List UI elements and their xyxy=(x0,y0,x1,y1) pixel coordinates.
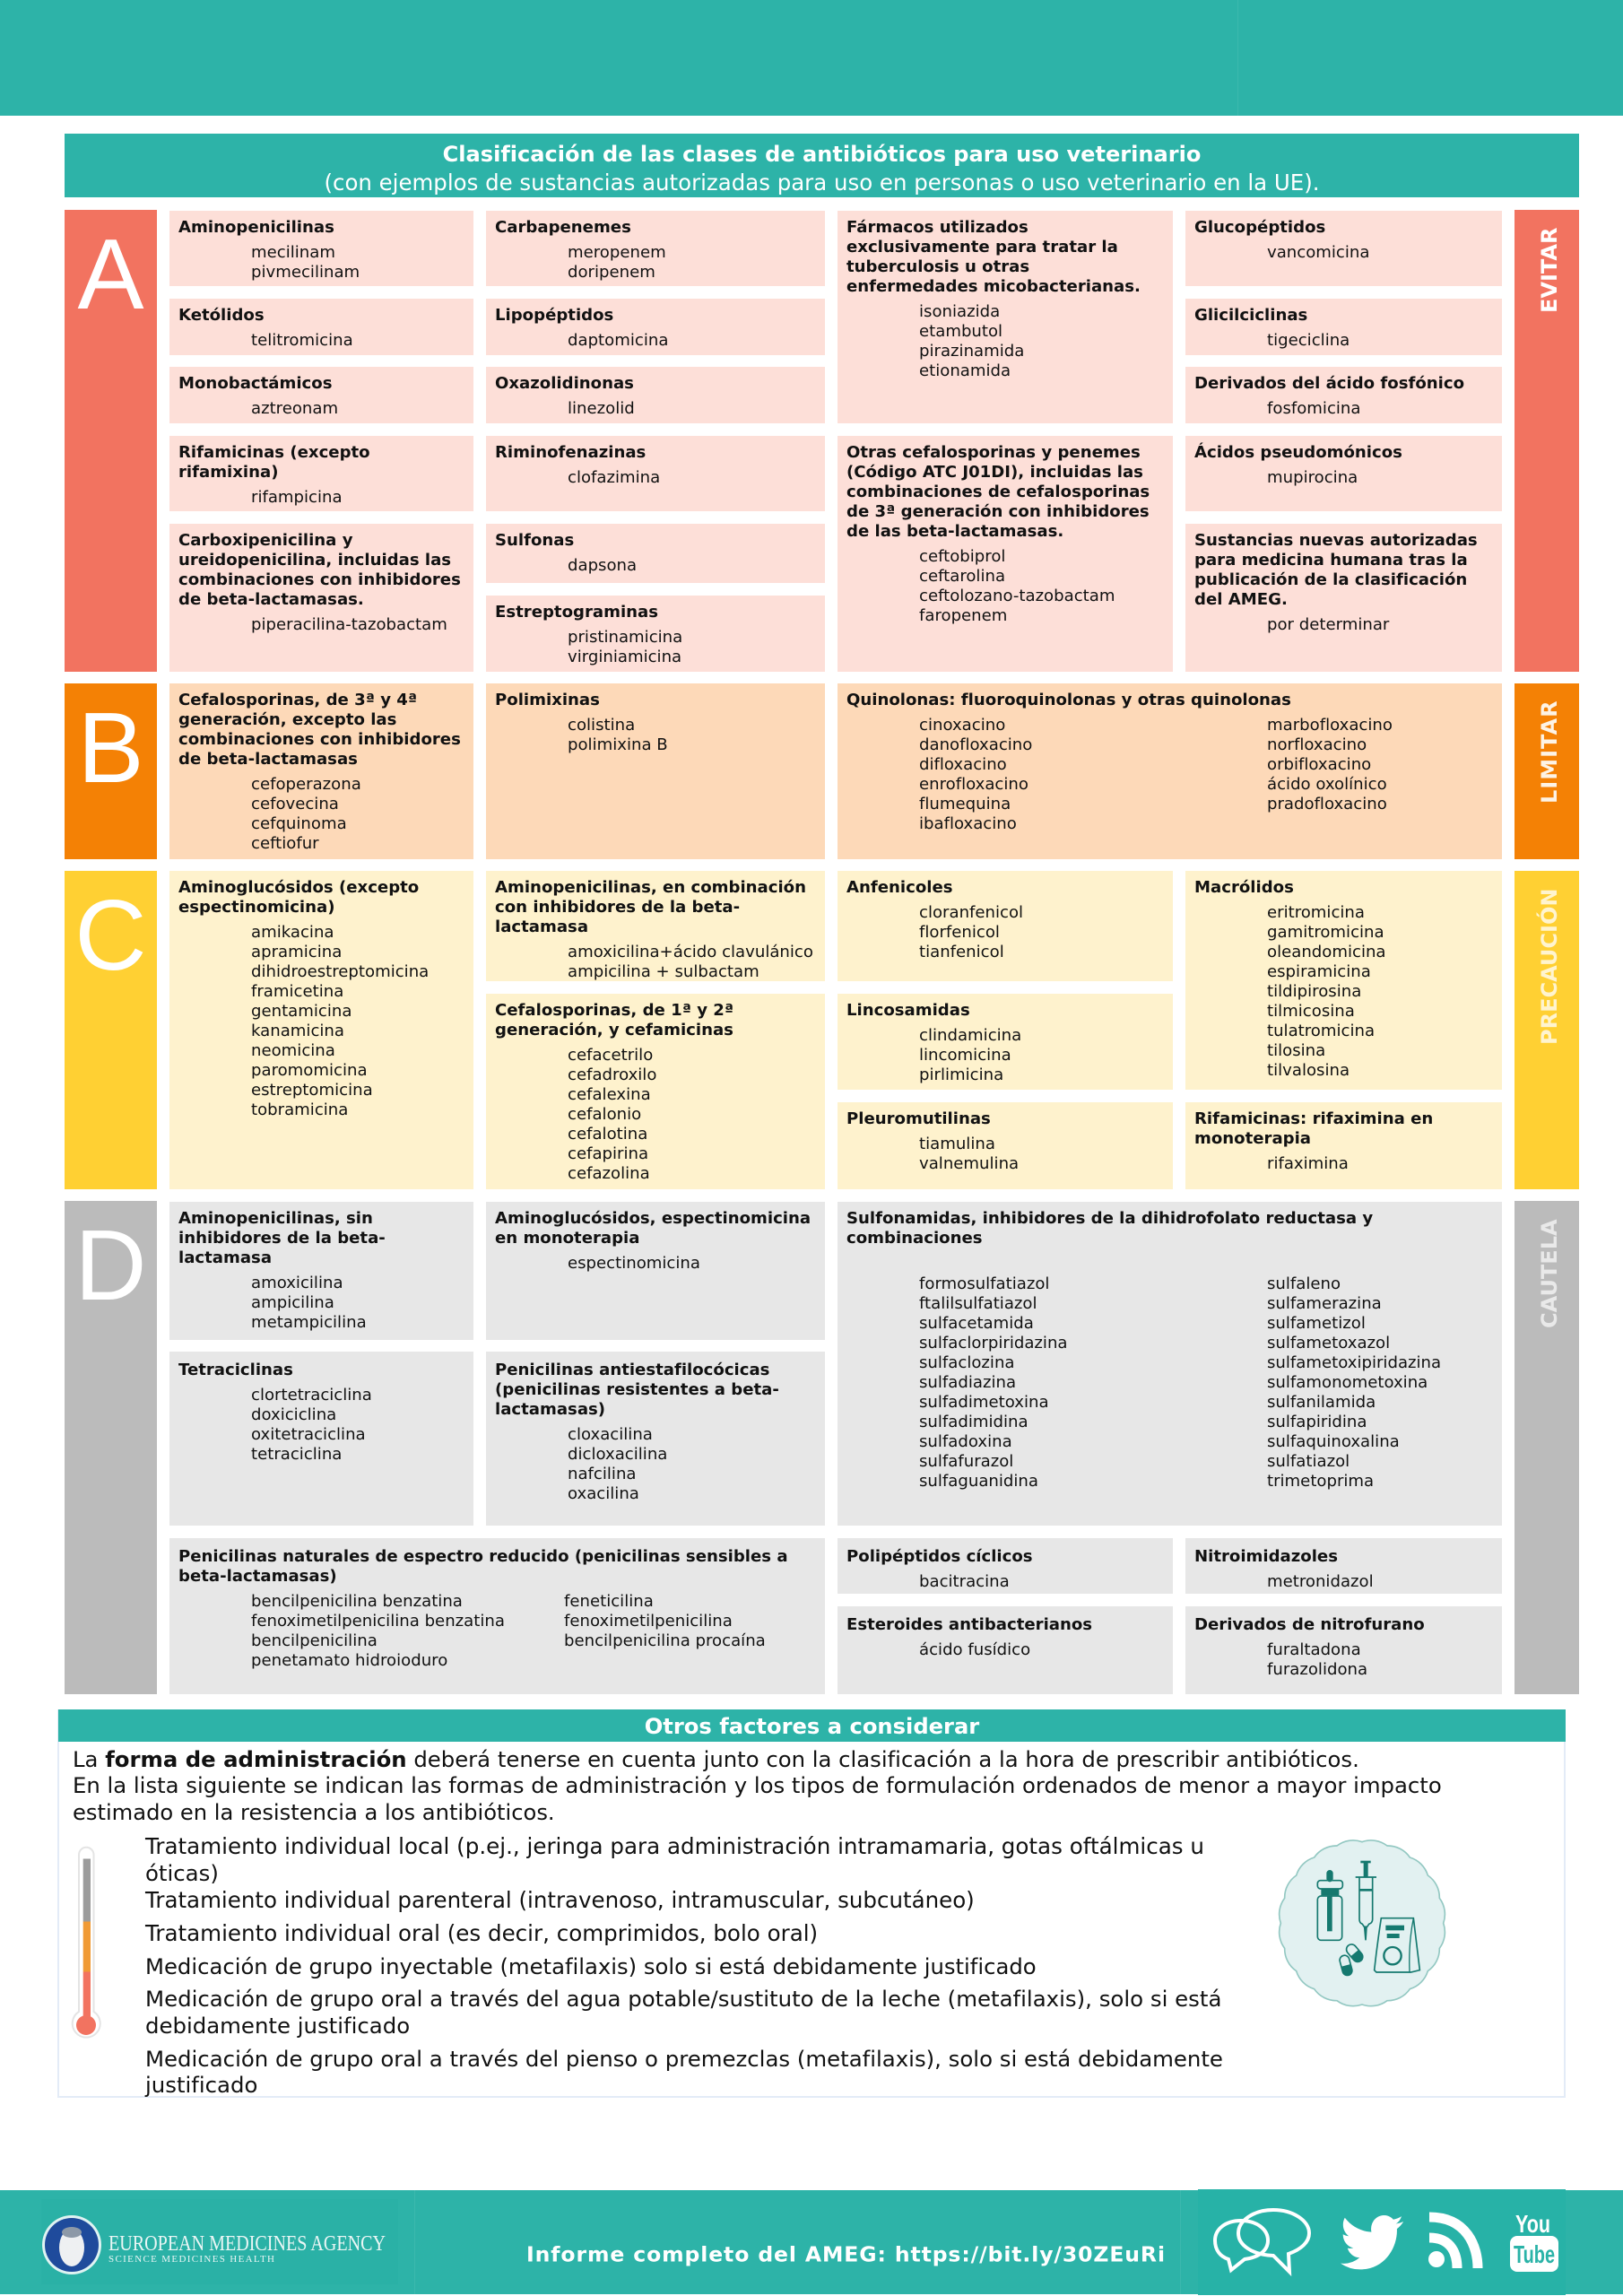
box: Aminoglucósidos: gentamicina xyxy=(251,1002,352,1021)
box: Sulfonamidas: sulfatiazol xyxy=(1267,1452,1350,1471)
box: Aminopenicilinas combinación: amoxicilina+ácido clavulánico xyxy=(568,943,813,961)
letter C xyxy=(65,871,157,1189)
box: Glucopéptidos: vancomicina xyxy=(1267,243,1369,262)
box: Sulfonamidas: sulfaleno xyxy=(1267,1274,1341,1293)
box: Rifamicinas rifaximina: monoterapia xyxy=(1194,1129,1311,1148)
box: Sustancias nuevas: por determinar xyxy=(1267,615,1389,634)
box: Cefalosporinas 1ª y 2ª: cefacetrilo xyxy=(568,1046,653,1065)
box: Oxazolidinonas: linezolid xyxy=(568,399,635,418)
label: EVITAR: EVITAR xyxy=(1537,228,1562,313)
box: Lipopéptidos: daptomicina xyxy=(568,331,668,350)
panel: category A xyxy=(65,210,1579,672)
box: Tetraciclinas xyxy=(169,1352,473,1526)
letter A xyxy=(65,210,157,672)
box: Polipéptidos cíclicos: bacitracina xyxy=(919,1572,1010,1591)
icon: chat bubbles xyxy=(1215,2210,1309,2272)
header band xyxy=(0,0,1623,116)
box: Ácidos pseudomónicos xyxy=(1185,436,1502,511)
box: Pleuromutilinas xyxy=(838,1102,1173,1189)
box: Aminoglucósidos: framicetina xyxy=(251,982,343,1001)
box: Penicilinas naturales: bencilpenicilina xyxy=(251,1631,378,1650)
box: Quinolonas: ibafloxacino xyxy=(919,814,1017,833)
footer band xyxy=(0,2189,1623,2295)
box: Derivados del ácido fosfónico: Derivados del ácido fosfónico xyxy=(1194,374,1464,393)
box: Quinolonas: Quinolonas: fluoroquinolonas y otras quinolonas xyxy=(846,691,1291,709)
box: Esteroides antibacterianos: Esteroides antibacterianos xyxy=(846,1615,1092,1634)
box: Sulfonamidas: sulfametoxazol xyxy=(1267,1334,1390,1352)
box: tuberculosis drugs: exclusivamente para tratar la xyxy=(846,238,1118,257)
box: Tetraciclinas: doxiciclina xyxy=(251,1405,336,1424)
box: Aminoglucósidos: Aminoglucósidos (excepto xyxy=(178,878,419,897)
box: Carbapenemes: meropenem xyxy=(568,243,666,262)
list of administration routes: debidamente justificado xyxy=(145,2013,410,2039)
panel: category B xyxy=(65,683,1579,859)
box: Rifamicinas xyxy=(169,436,473,511)
label: PRECAUCIÓN: PRECAUCIÓN xyxy=(1537,889,1562,1045)
box: Cefalosporinas 1ª y 2ª: cefadroxilo xyxy=(568,1065,656,1084)
box: Cefalosporinas 3ª y 4ª: combinaciones con inhibidores xyxy=(178,730,461,749)
box: Aminoglucósidos: apramicina xyxy=(251,943,342,961)
box: Penicilinas antiestafilocócicas: cloxacilina xyxy=(568,1425,653,1444)
box: other cephalosporins: ceftobiprol xyxy=(919,547,1005,566)
box: Estreptograminas: Estreptograminas xyxy=(495,603,658,622)
box: Cefalosporinas 1ª y 2ª: cefazolina xyxy=(568,1164,650,1183)
panel: category D xyxy=(65,1201,1579,1694)
list of administration routes: óticas) xyxy=(145,1860,219,1886)
icon: medication forms xyxy=(1279,1839,1445,2007)
box: Aminopenicilinas combinación xyxy=(486,871,825,981)
box: Carbapenemes: Carbapenemes xyxy=(495,218,631,237)
box: Estreptograminas: virginiamicina xyxy=(568,648,681,666)
logo: European Medicines Agency: SCIENCE MEDICINES HEALTH xyxy=(108,2254,274,2265)
box: Penicilinas naturales: penetamato hidroioduro xyxy=(251,1651,447,1670)
box: Aminopenicilinas sin inhibidores: ampicilina xyxy=(251,1293,334,1312)
box: Sulfonamidas: trimetoprima xyxy=(1267,1472,1374,1491)
box: Macrólidos: eritromicina xyxy=(1267,903,1365,922)
box: Oxazolidinonas: Oxazolidinonas xyxy=(495,374,634,393)
box: Monobactámicos: Monobactámicos xyxy=(178,374,332,393)
box: tuberculosis drugs: etionamida xyxy=(919,361,1011,380)
box: other cephalosporins: (Código ATC J01DI), incluidas las xyxy=(846,463,1143,482)
title bar: Clasificación de las clases de antibióticos para uso veterinario xyxy=(443,142,1201,167)
box: Penicilinas naturales: bencilpenicilina benzatina xyxy=(251,1592,463,1611)
box: Sulfonamidas: sulfanilamida xyxy=(1267,1393,1376,1412)
box: Anfenicoles: tianfenicol xyxy=(919,943,1004,961)
box: Aminoglucósidos: dihidroestreptomicina xyxy=(251,962,429,981)
box: Aminopenicilinas sin inhibidores: Aminopenicilinas, sin xyxy=(178,1209,373,1228)
box: Quinolonas: enrofloxacino xyxy=(919,775,1028,794)
box: Sustancias nuevas xyxy=(1185,524,1502,672)
box: Sustancias nuevas: del AMEG. xyxy=(1194,590,1288,609)
box: Esteroides antibacterianos: ácido fusídico xyxy=(919,1640,1030,1659)
box: Riminofenazinas: clofazimina xyxy=(568,468,660,487)
box: Nitroimidazoles: metronidazol xyxy=(1267,1572,1374,1591)
letter D: D xyxy=(74,1209,147,1320)
box: Aminoglucósidos espectinomicina: en monoterapia xyxy=(495,1229,639,1248)
box: Aminoglucósidos: estreptomicina xyxy=(251,1081,373,1100)
box: Cefalosporinas 1ª y 2ª: cefalonio xyxy=(568,1105,641,1124)
box: Anfenicoles: florfenicol xyxy=(919,923,1000,942)
box: Cefalosporinas 1ª y 2ª: Cefalosporinas, de 1ª y 2ª xyxy=(495,1001,733,1020)
box: Anfenicoles: Anfenicoles xyxy=(846,878,953,897)
box: Cefalosporinas 3ª y 4ª: Cefalosporinas, de 3ª y 4ª xyxy=(178,691,417,709)
box: Tetraciclinas: oxitetraciclina xyxy=(251,1425,366,1444)
box: Sulfonamidas: sulfaclozina xyxy=(919,1353,1015,1372)
box: Aminopenicilinas combinación: con inhibidores de la beta- xyxy=(495,898,740,917)
box: Rifamicinas rifaximina: rifaximina xyxy=(1267,1154,1349,1173)
box: Pleuromutilinas: Pleuromutilinas xyxy=(846,1109,991,1128)
box: Nitroimidazoles: Nitroimidazoles xyxy=(1194,1547,1338,1566)
box: Macrólidos: tilosina xyxy=(1267,1041,1325,1060)
box: Anfenicoles: cloranfenicol xyxy=(919,903,1023,922)
box: Quinolonas: pradofloxacino xyxy=(1267,795,1387,813)
box: Polimixinas: polimixina B xyxy=(568,735,668,754)
box: Quinolonas: cinoxacino xyxy=(919,716,1005,735)
box: Tetraciclinas: clortetraciclina xyxy=(251,1386,372,1405)
box: Monobactámicos xyxy=(169,367,473,423)
box: Derivados de nitrofurano xyxy=(1185,1606,1502,1694)
box: other cephalosporins: ceftolozano-tazobactam xyxy=(919,587,1115,605)
box: Sulfonamidas: ftalilsulfatiazol xyxy=(919,1294,1037,1313)
intro text: En la lista siguiente se indican las formas de administración y los tipos de formulación ordenados de menor a mayor impacto xyxy=(73,1772,1442,1798)
box: Derivados de nitrofurano: furazolidona xyxy=(1267,1660,1367,1679)
box: Sustancias nuevas: Sustancias nuevas autorizadas xyxy=(1194,531,1478,550)
box: Sulfonamidas: Sulfonamidas, inhibidores de la dihidrofolato reductasa y xyxy=(846,1209,1373,1228)
box: Carboxipenicilina: Carboxipenicilina y xyxy=(178,531,353,550)
box: Aminoglucósidos: paromomicina xyxy=(251,1061,368,1080)
title bar xyxy=(65,134,1579,197)
box: Penicilinas antiestafilocócicas xyxy=(486,1352,825,1526)
label: EVITAR xyxy=(1515,210,1579,672)
box: Aminopenicilinas combinación: Aminopenicilinas, en combinación xyxy=(495,878,806,897)
box: Lincosamidas: Lincosamidas xyxy=(846,1001,970,1020)
box: Derivados de nitrofurano: Derivados de nitrofurano xyxy=(1194,1615,1425,1634)
box: Penicilinas antiestafilocócicas: (penicilinas resistentes a beta- xyxy=(495,1380,779,1399)
box: Cefalosporinas 3ª y 4ª: cefovecina xyxy=(251,795,339,813)
box: Sulfonamidas: sulfaquinoxalina xyxy=(1267,1432,1400,1451)
box: Lipopéptidos: Lipopéptidos xyxy=(495,306,613,325)
box: Ácidos pseudomónicos: Ácidos pseudomónicos xyxy=(1194,443,1402,462)
box: Penicilinas antiestafilocócicas: oxacilina xyxy=(568,1484,639,1503)
box: Aminoglucósidos espectinomicina: Aminoglucósidos, espectinomicina xyxy=(495,1209,811,1228)
box: Macrólidos xyxy=(1185,871,1502,1090)
box: Quinolonas xyxy=(838,683,1502,859)
icon: youtube: You xyxy=(1515,2210,1550,2238)
intro text: La forma de administración deberá tenerse en cuenta junto con la clasificación a la hora de prescribir antibióticos. xyxy=(73,1745,1359,1772)
intro text xyxy=(73,1745,1442,1825)
box: Polimixinas xyxy=(486,683,825,859)
box: Aminoglucósidos: espectinomicina) xyxy=(178,898,335,917)
box: Sulfonamidas: combinaciones xyxy=(846,1229,983,1248)
box: Oxazolidinonas xyxy=(486,367,825,423)
box: Macrólidos: tulatromicina xyxy=(1267,1022,1375,1040)
box: Sulfonamidas: sulfametizol xyxy=(1267,1314,1366,1333)
box: Carboxipenicilina xyxy=(169,524,473,672)
box: Lincosamidas: lincomicina xyxy=(919,1046,1011,1065)
box: Macrólidos: oleandomicina xyxy=(1267,943,1386,961)
box: tuberculosis drugs: isoniazida xyxy=(919,302,1000,321)
box: Cefalosporinas 3ª y 4ª: ceftiofur xyxy=(251,834,319,853)
box: Penicilinas antiestafilocócicas: lactamasas) xyxy=(495,1400,605,1419)
box: Cefalosporinas 1ª y 2ª: cefalexina xyxy=(568,1085,651,1104)
box: Carboxipenicilina: de beta-lactamasas. xyxy=(178,590,364,609)
box: Aminopenicilinas: mecilinam xyxy=(251,243,335,262)
box: Aminoglucósidos espectinomicina xyxy=(486,1202,825,1340)
box: Quinolonas: flumequina xyxy=(919,795,1011,813)
box: Carboxipenicilina: combinaciones con inhibidores xyxy=(178,570,461,589)
box: Nitroimidazoles xyxy=(1185,1538,1502,1594)
panel: category C xyxy=(65,871,1579,1189)
box: Aminopenicilinas combinación: ampicilina + sulbactam xyxy=(568,962,759,981)
box: tuberculosis drugs: tuberculosis u otras xyxy=(846,257,1029,276)
box: Pleuromutilinas: valnemulina xyxy=(919,1154,1019,1173)
list of administration routes: Medicación de grupo oral a través del agua potable/sustituto de la leche (metafilaxis), solo si está xyxy=(145,1986,1221,2012)
box: Aminoglucósidos xyxy=(169,871,473,1189)
box: Riminofenazinas xyxy=(486,436,825,511)
box: tuberculosis drugs: enfermedades micobacterianas. xyxy=(846,277,1141,296)
box: Aminopenicilinas sin inhibidores xyxy=(169,1202,473,1340)
box: Derivados del ácido fosfónico xyxy=(1185,367,1502,423)
box: Monobactámicos: aztreonam xyxy=(251,399,338,418)
box: Aminoglucósidos espectinomicina: espectinomicina xyxy=(568,1254,700,1273)
box: Polimixinas: colistina xyxy=(568,716,635,735)
box: other cephalosporins: ceftarolina xyxy=(919,567,1005,586)
box: Sulfonamidas: formosulfatiazol xyxy=(919,1274,1049,1293)
box: Sulfonas: Sulfonas xyxy=(495,531,574,550)
letter A: A xyxy=(77,219,144,330)
box: Macrólidos: tildipirosina xyxy=(1267,982,1361,1001)
box: Cefalosporinas 1ª y 2ª xyxy=(486,994,825,1189)
box: Lincosamidas xyxy=(838,994,1173,1090)
box: Cefalosporinas 3ª y 4ª: generación, excepto las xyxy=(178,710,396,729)
box: other cephalosporins xyxy=(838,436,1173,672)
icon: thermometer xyxy=(72,1846,101,2038)
box: Polimixinas: Polimixinas xyxy=(495,691,600,709)
box: Penicilinas naturales: bencilpenicilina procaína xyxy=(564,1631,766,1650)
box: Cefalosporinas 3ª y 4ª: cefoperazona xyxy=(251,775,361,794)
box: Aminoglucósidos: tobramicina xyxy=(251,1100,348,1119)
box: Penicilinas naturales: fenoximetilpenicilina benzatina xyxy=(251,1612,505,1631)
icon: twitter xyxy=(1341,2215,1403,2269)
box: Quinolonas: marbofloxacino xyxy=(1267,716,1393,735)
icon: rss xyxy=(1428,2217,1478,2268)
label: PRECAUCIÓN xyxy=(1515,871,1579,1189)
box: Esteroides antibacterianos xyxy=(838,1606,1173,1694)
box: Sulfonamidas: sulfadimidina xyxy=(919,1413,1028,1431)
list of administration routes: Medicación de grupo inyectable (metafilaxis) solo si está debidamente justificado xyxy=(145,1953,1037,1979)
box: Sulfonamidas: sulfaguanidina xyxy=(919,1472,1038,1491)
box: Macrólidos: espiramicina xyxy=(1267,962,1371,981)
box: Sulfonamidas: sulfacetamida xyxy=(919,1314,1034,1333)
box: Aminopenicilinas sin inhibidores: inhibidores de la beta- xyxy=(178,1229,386,1248)
box: Macrólidos: tilmicosina xyxy=(1267,1002,1355,1021)
list of administration routes: Tratamiento individual parenteral (intravenoso, intramuscular, subcutáneo) xyxy=(145,1887,975,1913)
label: CAUTELA: CAUTELA xyxy=(1537,1219,1562,1328)
box: Sulfonamidas: sulfadoxina xyxy=(919,1432,1012,1451)
box: Aminoglucósidos: neomicina xyxy=(251,1041,335,1060)
box: Aminopenicilinas sin inhibidores: amoxicilina xyxy=(251,1274,343,1292)
box: other cephalosporins: de 3ª generación con inhibidores xyxy=(846,502,1150,521)
box: Sulfonamidas: sulfamonometoxina xyxy=(1267,1373,1428,1392)
box: Glicilciclinas: Glicilciclinas xyxy=(1194,306,1307,325)
box: Quinolonas: norfloxacino xyxy=(1267,735,1367,754)
box: Aminopenicilinas combinación: lactamasa xyxy=(495,918,588,936)
box: Sulfonamidas: sulfaclorpiridazina xyxy=(919,1334,1067,1352)
title bar: (con ejemplos de sustancias autorizadas para uso en personas o uso veterinario en la UE). xyxy=(324,169,1320,196)
box: Quinolonas: danofloxacino xyxy=(919,735,1032,754)
box: Ketólidos: Ketólidos xyxy=(178,306,265,325)
report link text: Informe completo del AMEG: https://bit.ly/30ZEuRi xyxy=(526,2242,1165,2267)
box: Glicilciclinas xyxy=(1185,299,1502,355)
box: Aminopenicilinas: pivmecilinam xyxy=(251,263,360,282)
list of administration routes xyxy=(145,1833,1223,2098)
box: Sulfonamidas: sulfamerazina xyxy=(1267,1294,1382,1313)
panel: otros factores xyxy=(57,1709,1566,2098)
box: Aminopenicilinas: Aminopenicilinas xyxy=(178,218,334,237)
box: Riminofenazinas: Riminofenazinas xyxy=(495,443,646,462)
box: Aminopenicilinas sin inhibidores: metampicilina xyxy=(251,1313,367,1332)
box: Tetraciclinas: Tetraciclinas xyxy=(178,1361,293,1379)
box: Carboxipenicilina: ureidopenicilina, incluidas las xyxy=(178,551,451,570)
box: Sulfonamidas: sulfadimetoxina xyxy=(919,1393,1049,1412)
label: CAUTELA xyxy=(1515,1201,1579,1694)
logo: European Medicines Agency: EUROPEAN MEDICINES AGENCY xyxy=(108,2232,386,2256)
box: Sulfonamidas: sulfapiridina xyxy=(1267,1413,1367,1431)
list of administration routes: justificado xyxy=(145,2072,257,2098)
box: Macrólidos: gamitromicina xyxy=(1267,923,1384,942)
box: Estreptograminas xyxy=(486,596,825,672)
box: Glucopéptidos: Glucopéptidos xyxy=(1194,218,1325,237)
box: Carbapenemes xyxy=(486,211,825,286)
box: Cefalosporinas 1ª y 2ª: cefapirina xyxy=(568,1144,648,1163)
box: Tetraciclinas: tetraciclina xyxy=(251,1445,342,1464)
box: Penicilinas naturales: beta-lactamasas) xyxy=(178,1567,337,1586)
box: Rifamicinas rifaximina xyxy=(1185,1102,1502,1189)
intro text: estimado en la resistencia a los antibióticos. xyxy=(73,1800,555,1825)
box: Macrólidos: tilvalosina xyxy=(1267,1061,1350,1080)
box: Polipéptidos cíclicos: Polipéptidos cíclicos xyxy=(846,1547,1033,1566)
box: Rifamicinas rifaximina: Rifamicinas: rifaximina en xyxy=(1194,1109,1433,1128)
box: other cephalosporins: Otras cefalosporinas y penemes xyxy=(846,443,1141,462)
box: Carbapenemes: doripenem xyxy=(568,263,655,282)
logo: European Medicines Agency xyxy=(41,2199,398,2284)
box: Cefalosporinas 3ª y 4ª: cefquinoma xyxy=(251,814,347,833)
box: tuberculosis drugs: pirazinamida xyxy=(919,342,1024,361)
list of administration routes: Tratamiento individual local (p.ej., jeringa para administración intramamaria, gotas oftálmicas u xyxy=(145,1833,1204,1859)
box: Ketólidos: telitromicina xyxy=(251,331,353,350)
box: Lipopéptidos xyxy=(486,299,825,355)
box: Derivados del ácido fosfónico: fosfomicina xyxy=(1267,399,1361,418)
letter B xyxy=(65,683,157,859)
box: Penicilinas naturales: feneticilina xyxy=(564,1592,654,1611)
box: Sulfonamidas xyxy=(838,1202,1502,1526)
box: Penicilinas antiestafilocócicas: nafcilina xyxy=(568,1465,637,1483)
box: other cephalosporins: faropenem xyxy=(919,606,1007,625)
icon: youtube xyxy=(1510,2210,1558,2272)
box: Aminoglucósidos: kanamicina xyxy=(251,1022,344,1040)
box: Penicilinas antiestafilocócicas: dicloxacilina xyxy=(568,1445,667,1464)
box: Rifamicinas: rifampicina xyxy=(251,488,343,507)
letter B: B xyxy=(77,692,144,804)
box: Cefalosporinas 3ª y 4ª: de beta-lactamasas xyxy=(178,750,358,769)
box: Estreptograminas: pristinamicina xyxy=(568,628,682,647)
box: other cephalosporins: de las beta-lactamasas. xyxy=(846,522,1063,541)
box: Derivados de nitrofurano: furaltadona xyxy=(1267,1640,1361,1659)
box: tuberculosis drugs xyxy=(838,211,1173,423)
box: Penicilinas antiestafilocócicas: Penicilinas antiestafilocócicas xyxy=(495,1361,769,1379)
list of administration routes: Medicación de grupo oral a través del pienso o premezclas (metafilaxis), solo si está debidamente xyxy=(145,2046,1223,2072)
box: Cefalosporinas 1ª y 2ª: generación, y cefamicinas xyxy=(495,1021,733,1039)
box: Rifamicinas: rifamixina) xyxy=(178,463,278,482)
box: Glucopéptidos xyxy=(1185,211,1502,286)
box: Aminoglucósidos: amikacina xyxy=(251,923,334,942)
box: Sulfonas: dapsona xyxy=(568,556,637,575)
box: tuberculosis drugs: etambutol xyxy=(919,322,1002,341)
box: Quinolonas: orbifloxacino xyxy=(1267,755,1371,774)
box: Ketólidos xyxy=(169,299,473,355)
label: LIMITAR xyxy=(1515,683,1579,859)
box: Quinolonas: ácido oxolínico xyxy=(1267,775,1387,794)
box: Lincosamidas: pirlimicina xyxy=(919,1065,1003,1084)
box: Penicilinas naturales: Penicilinas naturales de espectro reducido (penicilinas sensibles a xyxy=(178,1547,788,1566)
box: Cefalosporinas 3ª y 4ª xyxy=(169,683,473,859)
box: Pleuromutilinas: tiamulina xyxy=(919,1135,995,1153)
box: Glicilciclinas: tigeciclina xyxy=(1267,331,1350,350)
box: Cefalosporinas 1ª y 2ª: cefalotina xyxy=(568,1125,647,1144)
box: Polipéptidos cíclicos xyxy=(838,1538,1173,1594)
letter D xyxy=(65,1201,157,1694)
letter C: C xyxy=(74,879,147,990)
box: Anfenicoles xyxy=(838,871,1173,981)
label: LIMITAR: LIMITAR xyxy=(1537,700,1562,804)
icon: youtube: Tube xyxy=(1514,2240,1555,2268)
box: other cephalosporins: combinaciones de cefalosporinas xyxy=(846,483,1150,501)
box: Sustancias nuevas: para medicina humana tras la xyxy=(1194,551,1468,570)
heading bar: Otros factores a considerar xyxy=(645,1714,979,1739)
box: Sulfonamidas: sulfametoxipiridazina xyxy=(1267,1353,1441,1372)
box: Carboxipenicilina: piperacilina-tazobactam xyxy=(251,615,447,634)
list of administration routes: Tratamiento individual oral (es decir, comprimidos, bolo oral) xyxy=(145,1920,818,1946)
box: Ácidos pseudomónicos: mupirocina xyxy=(1267,468,1358,487)
box: Aminopenicilinas xyxy=(169,211,473,286)
box: Macrólidos: Macrólidos xyxy=(1194,878,1294,897)
box: Penicilinas naturales: fenoximetilpenicilina xyxy=(564,1612,733,1631)
box: Sulfonas xyxy=(486,524,825,583)
box: Lincosamidas: clindamicina xyxy=(919,1026,1021,1045)
box: Aminopenicilinas sin inhibidores: lactamasa xyxy=(178,1248,272,1267)
box: Sulfonamidas: sulfafurazol xyxy=(919,1452,1013,1471)
heading bar xyxy=(58,1709,1566,1742)
box: Quinolonas: difloxacino xyxy=(919,755,1007,774)
box: tuberculosis drugs: Fármacos utilizados xyxy=(846,218,1028,237)
box: Penicilinas naturales xyxy=(169,1538,825,1694)
box: Sustancias nuevas: publicación de la clasificación xyxy=(1194,570,1467,589)
box: Sulfonamidas: sulfadiazina xyxy=(919,1373,1016,1392)
box: Rifamicinas: Rifamicinas (excepto xyxy=(178,443,370,462)
